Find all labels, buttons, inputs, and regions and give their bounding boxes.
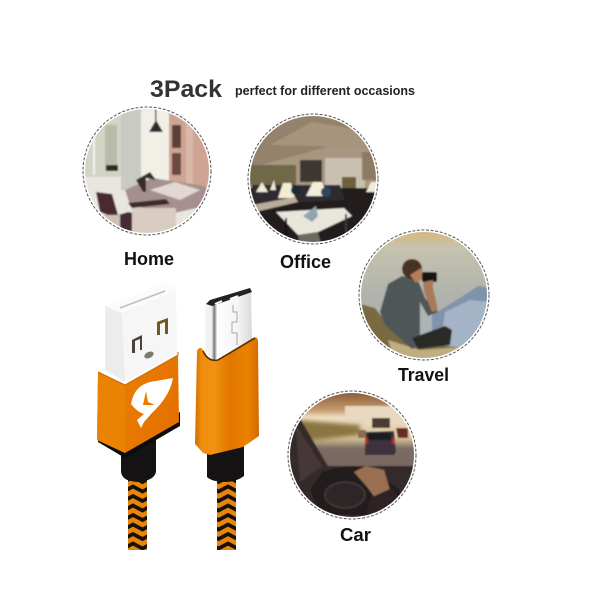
- title: 3Pack: 3Pack: [150, 76, 222, 103]
- black collar: [98, 412, 180, 458]
- photo circle: Home: [80, 105, 215, 236]
- black strain relief: USB-A: [121, 435, 156, 482]
- label: Car: Car: [340, 525, 371, 545]
- subtitle: perfect for different occasions: [235, 84, 415, 98]
- USB-C connector: [195, 288, 259, 550]
- label: Home: Home: [124, 249, 174, 269]
- orange shell: [195, 338, 259, 455]
- photo circle: Office: [245, 112, 381, 248]
- logo on shell: [131, 378, 173, 428]
- braided cable: USB-A: [128, 478, 147, 550]
- braided cable: USB-C: [217, 478, 236, 550]
- plug contact holes: [132, 335, 142, 353]
- metal plug: [205, 291, 252, 360]
- label: Office: Office: [280, 252, 331, 272]
- photo circle: Car: [288, 391, 416, 520]
- label: Travel: Travel: [398, 365, 449, 385]
- USB-A connector: [97, 283, 180, 550]
- white plug: [105, 283, 177, 382]
- orange shell: [97, 355, 179, 453]
- photo circle: Travel: [358, 230, 490, 362]
- black strain relief: USB-C: [207, 440, 244, 482]
